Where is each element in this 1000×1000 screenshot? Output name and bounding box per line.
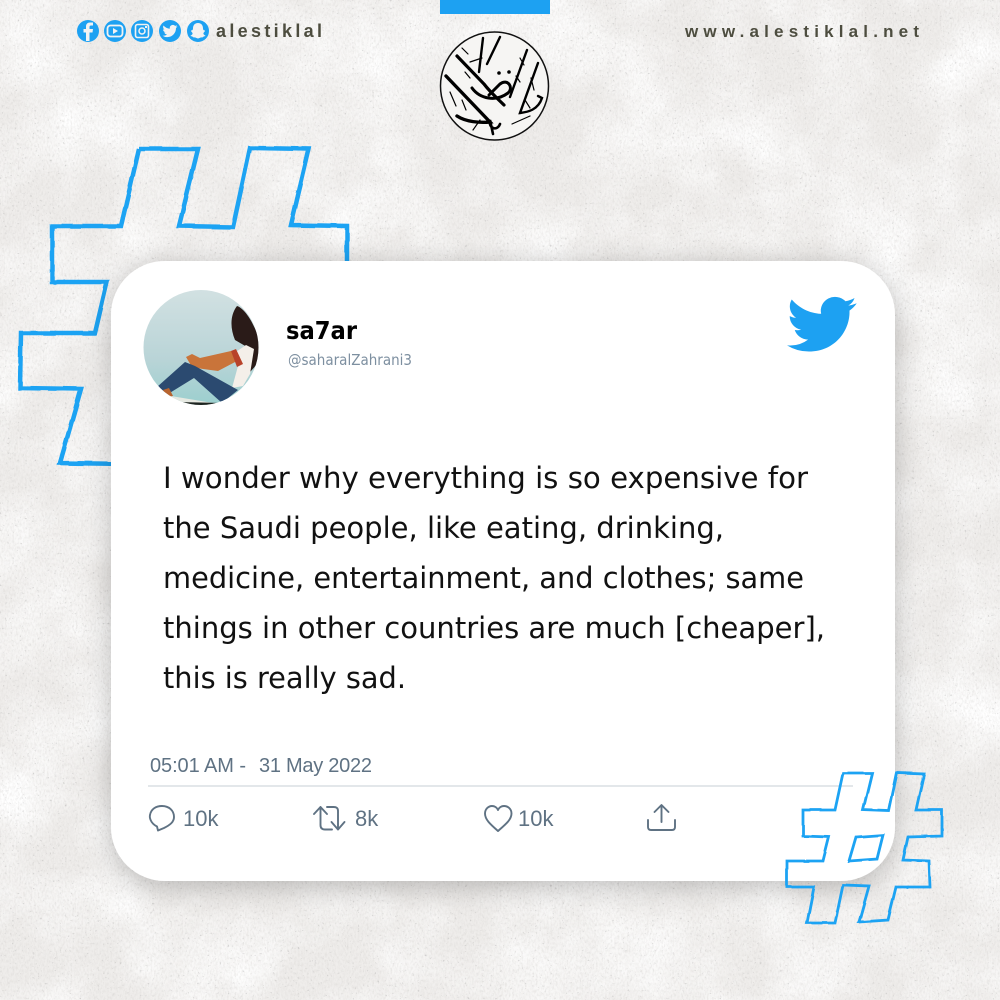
icon: heart [485,806,512,831]
left hashtag outline [20,148,347,464]
tweet text: medicine, entertainment, and clothes; same [163,561,804,595]
avatar: woman sitting by the sea [143,289,259,408]
icon: reply [150,806,174,830]
icon: share [648,805,675,830]
icon: retweet [314,807,344,830]
icon: twitter bird [787,297,857,352]
tweet text: things in other countries are much [cheaper], [163,611,825,645]
logo emblem [440,32,548,140]
website url: www.alestiklal.net [684,22,919,41]
icon: snapchat [187,20,209,42]
timestamp: 31 May 2022 [259,755,372,777]
replies: 10k [183,806,219,831]
likes [485,806,554,831]
retweets [314,806,379,831]
timestamp [150,755,372,777]
icon: twitter [159,20,181,42]
likes: 10k [518,806,554,831]
top accent bar [440,0,550,14]
user name: sa7ar [286,316,358,345]
brand name: alestiklal [216,21,322,41]
timestamp: 05:01 AM - [150,755,246,777]
tweet text [163,461,825,695]
icon: youtube [104,20,126,42]
tweet card [111,261,895,881]
icon: instagram [131,20,153,42]
tweet text: this is really sad. [163,661,406,695]
card background [111,261,895,881]
user handle: @saharalZahrani3 [288,351,412,369]
tweet text: the Saudi people, like eating, drinking, [163,511,724,545]
social media icons [77,20,209,42]
icon: facebook [77,20,99,42]
tweet text: I wonder why everything is so expensive for [163,461,809,495]
retweets: 8k [355,806,379,831]
right hashtag outline [787,773,942,923]
replies [150,806,219,831]
